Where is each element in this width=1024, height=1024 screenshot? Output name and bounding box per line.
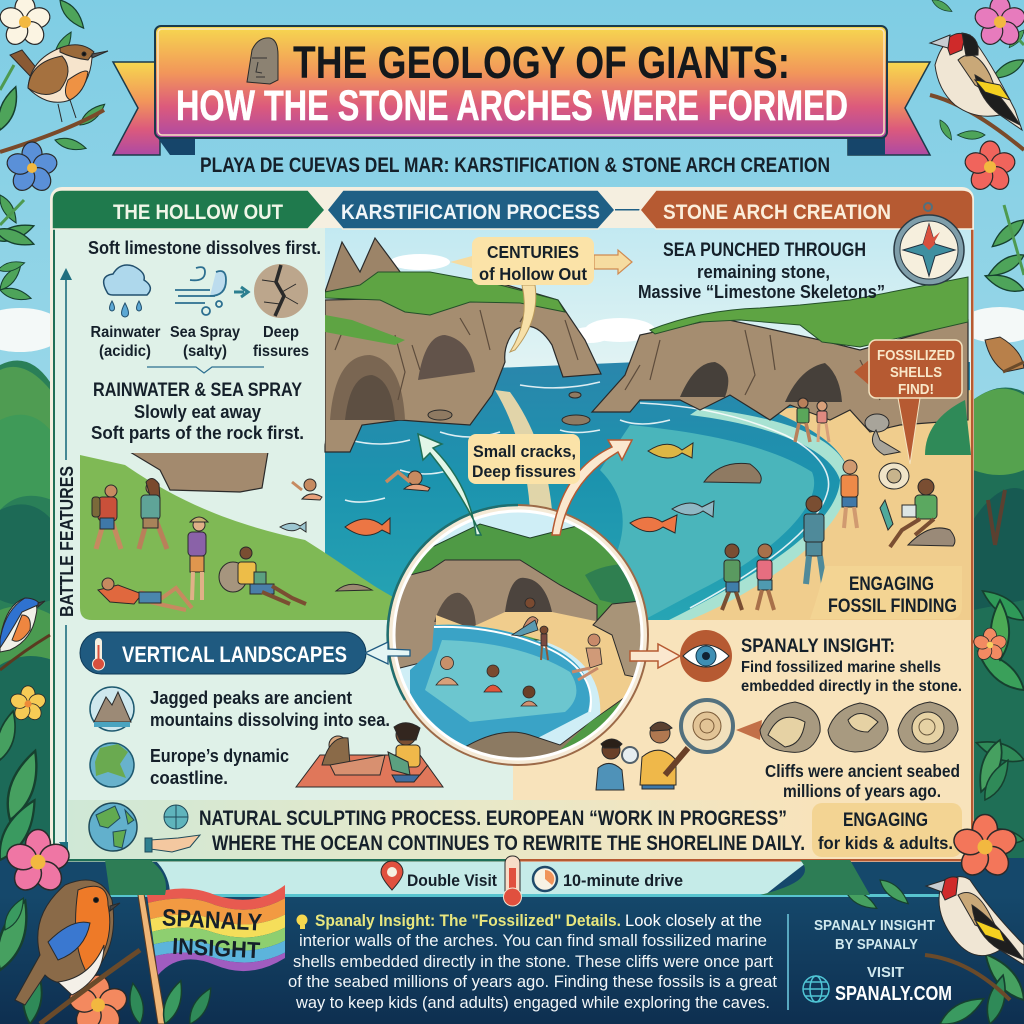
callout: centuries: CENTURIES — [487, 242, 579, 262]
text: cliffs were seabed: millions of years ago. — [783, 781, 941, 801]
cave rock — [390, 560, 597, 668]
text: cliffs were seabed: Cliffs were ancient seabed — [765, 761, 960, 781]
icon labels: fissures — [253, 343, 309, 360]
bird: robin — [15, 880, 140, 1024]
callout: fossilized shells: SHELLS — [890, 365, 942, 381]
bottom rocks — [466, 698, 624, 758]
arrow: circle to right cliffs — [552, 440, 632, 535]
footer: brand: BY SPANALY — [835, 937, 918, 953]
text: cliffs were seabed — [765, 761, 960, 801]
info: double visit — [381, 861, 497, 890]
beach people — [722, 398, 955, 610]
left cliffs grass — [325, 272, 565, 315]
flower: bottom orange — [66, 975, 130, 1024]
icon: thermometer — [504, 856, 522, 906]
arrow: circle to pill — [365, 642, 410, 664]
flower: yellow — [9, 686, 47, 723]
text block: sea punched through: remaining stone, — [697, 262, 830, 282]
text panel: hollow out: Soft parts of the rock first. — [91, 423, 304, 443]
flag: spanaly insight — [138, 885, 285, 1024]
fossils — [760, 702, 958, 752]
arrow: circle to insight — [630, 644, 680, 668]
text: jagged peaks: mountains dissolving into sea. — [150, 710, 390, 730]
text: spanaly insight: Find fossilized marine shells — [741, 659, 941, 676]
footer insight text — [288, 911, 777, 1012]
callout: fossilized shells: FIND! — [898, 382, 934, 398]
sea rocks — [428, 392, 761, 483]
picnic scene — [296, 723, 443, 787]
band: vertical landscapes panel — [80, 622, 513, 800]
icon labels: (acidic) — [99, 343, 151, 360]
footer: brand: SPANALY INSIGHT — [814, 918, 935, 934]
footer insight text: of the seabed millions of years ago. Finding these fossils is a great — [288, 972, 777, 991]
sea pale shallows — [590, 425, 814, 622]
text: spanaly insight — [741, 636, 962, 695]
right bushes — [925, 400, 971, 455]
label: engaging fossil finding: ENGAGING — [849, 574, 934, 595]
info: drive time: 10-minute drive — [563, 871, 683, 890]
right lower panel — [600, 620, 971, 800]
flower: bottom pink — [4, 830, 72, 895]
ribbon right tail — [848, 62, 930, 155]
foam and ripples — [345, 382, 829, 608]
text block: sea punched through — [638, 239, 885, 302]
badge: engaging: for kids & adults. — [818, 833, 953, 853]
pill: vertical landscapes: VERTICAL LANDSCAPES — [122, 642, 347, 667]
left foliage — [0, 360, 52, 880]
flower: blue — [4, 142, 60, 195]
sea — [325, 362, 970, 622]
arrow: spray to fissures — [234, 287, 248, 297]
bird: goldfinch bottom — [925, 877, 1024, 1000]
tab: stone arch: STONE ARCH CREATION — [663, 201, 891, 224]
label: engaging fossil finding — [810, 566, 962, 619]
cliff cracks — [335, 305, 578, 400]
tab: karstification: KARSTIFICATION PROCESS — [341, 201, 600, 224]
brace — [147, 367, 264, 373]
flag: spanaly insight: INSIGHT — [171, 933, 261, 963]
pointer: magnifier to fossils — [736, 720, 762, 740]
flower: white — [0, 0, 53, 49]
callout: fossilized shells — [854, 340, 962, 464]
tab: hollow out — [52, 190, 325, 229]
intro line: Soft limestone dissolves first. — [88, 238, 321, 258]
text panel: hollow out: Slowly eat away — [134, 402, 261, 422]
central circle scene — [388, 505, 650, 770]
icon: europe globe — [90, 743, 134, 787]
tab: karstification — [327, 190, 615, 229]
icon: rain cloud — [104, 265, 150, 317]
icon: compass — [894, 203, 964, 285]
bird: bluebird left — [0, 598, 50, 670]
right cliffs rock — [592, 318, 968, 432]
fish — [280, 443, 714, 535]
icon labels — [90, 324, 309, 360]
bird: small right — [985, 337, 1024, 372]
footer: brand — [803, 918, 952, 1005]
icon: moai — [247, 38, 278, 84]
callout: small cracks: Small cracks, — [473, 443, 576, 461]
footer insight text: Look closely at the — [625, 911, 762, 930]
main panel — [50, 187, 974, 862]
subtitle: PLAYA DE CUEVAS DEL MAR: KARSTIFICATION & STONE ARCH CREATION — [200, 154, 830, 177]
icon labels: Deep — [263, 324, 299, 341]
text block: sea punched through: Massive “Limestone Skeletons” — [638, 282, 885, 302]
icon labels: (salty) — [183, 343, 227, 360]
water — [410, 625, 590, 752]
lower strip and navy footer — [0, 858, 1024, 1024]
scene: coastline — [80, 238, 971, 622]
bird: goldfinch top — [930, 33, 1022, 130]
icon: eye — [680, 630, 732, 682]
right foliage — [973, 388, 1024, 880]
footer insight text: way to keep kids (and adults) engaged while exploring the caves. — [295, 993, 770, 1012]
tab: hollow out: THE HOLLOW OUT — [113, 201, 283, 224]
footer: brand: SPANALY.COM — [835, 983, 952, 1005]
sand — [436, 612, 640, 720]
swimmers — [292, 471, 430, 500]
icon: hand with globe — [145, 805, 200, 852]
callout: small cracks — [468, 434, 580, 484]
banner body — [155, 26, 887, 138]
hikers on the meadow — [92, 478, 372, 610]
text: jagged peaks: Jagged peaks are ancient — [150, 688, 352, 708]
hills — [412, 524, 618, 640]
fossil finding people and magnifier — [596, 700, 733, 790]
rock pillars by the meadow — [130, 452, 268, 492]
divider — [787, 914, 789, 1010]
badge: engaging — [812, 803, 962, 857]
callout: fossilized shells: FOSSILIZED — [877, 348, 955, 364]
beach — [685, 390, 971, 622]
side arrow: battle features: BATTLE FEATURES — [57, 466, 77, 617]
left cliffs peaks — [325, 238, 412, 292]
callout: centuries — [450, 237, 632, 352]
strip: natural sculpting: NATURAL SCULPTING PROCESS. EUROPEAN “WORK IN PROGRESS” — [199, 807, 787, 830]
text panel: hollow out — [80, 230, 325, 453]
right cliffs grass — [650, 277, 968, 347]
flower: right red — [962, 141, 1018, 194]
text: jagged peaks — [150, 688, 390, 730]
label: engaging fossil finding: FOSSIL FINDING — [828, 596, 957, 617]
tab: stone arch — [640, 190, 973, 229]
icon: cracked stone — [254, 264, 308, 318]
icon labels: Sea Spray — [170, 324, 240, 341]
footer insight text: Spanaly Insight: The "Fossilized" Details. — [315, 911, 621, 930]
flower: small orange — [972, 628, 1008, 662]
side arrow: battle features — [57, 268, 77, 853]
icon labels: Rainwater — [90, 324, 160, 341]
callout: centuries: of Hollow Out — [479, 264, 587, 284]
info: double visit: Double Visit — [407, 871, 497, 890]
flower: top pink — [972, 0, 1024, 49]
text: europe coastline: coastline. — [150, 768, 228, 788]
ribbon left tail — [113, 62, 160, 155]
badge: engaging: ENGAGING — [843, 810, 928, 831]
clouds — [390, 254, 655, 343]
header tabs — [52, 190, 973, 229]
text: spanaly insight: embedded directly in the stone. — [741, 678, 962, 695]
footer insight text: shells embedded directly in the stone. These cliffs were once part — [293, 952, 773, 971]
flower: right orange — [951, 814, 1019, 880]
flag: spanaly insight: SPANALY — [161, 904, 263, 937]
callout: small cracks: Deep fissures — [472, 463, 576, 481]
footer insight text: interior walls of the arches. You can find small fossilized marine — [299, 931, 767, 950]
icon: world globe — [89, 803, 137, 851]
summary: RAINWATER & SEA SPRAY — [93, 380, 302, 401]
circle figures — [436, 598, 602, 706]
title line 1: THE GEOLOGY OF GIANTS: — [293, 37, 790, 88]
clouds behind side foliage — [0, 307, 1024, 352]
strip: natural sculpting: WHERE THE OCEAN CONTINUES TO REWRITE THE SHORELINE DAILY. — [212, 832, 805, 855]
text: spanaly insight: SPANALY INSIGHT: — [741, 636, 895, 657]
left cliffs rock — [325, 283, 601, 452]
meadow — [80, 455, 395, 620]
pill: vertical landscapes — [80, 632, 366, 674]
arrow: circle to left bay — [418, 434, 481, 535]
right rocks — [592, 601, 640, 678]
text: europe coastline: Europe’s dynamic — [150, 746, 289, 766]
bird: wren — [10, 45, 108, 122]
text: europe coastline — [150, 746, 289, 788]
icon: mountains — [90, 687, 134, 731]
text block: sea punched through: SEA PUNCHED THROUGH — [663, 239, 866, 261]
icon: sea spray wind — [175, 267, 226, 315]
arrow: to process from centre pale — [495, 390, 552, 510]
footer: brand: VISIT — [867, 964, 904, 981]
strip: natural sculpting — [68, 800, 813, 859]
title banner — [113, 26, 930, 155]
info: drive time — [533, 867, 683, 891]
